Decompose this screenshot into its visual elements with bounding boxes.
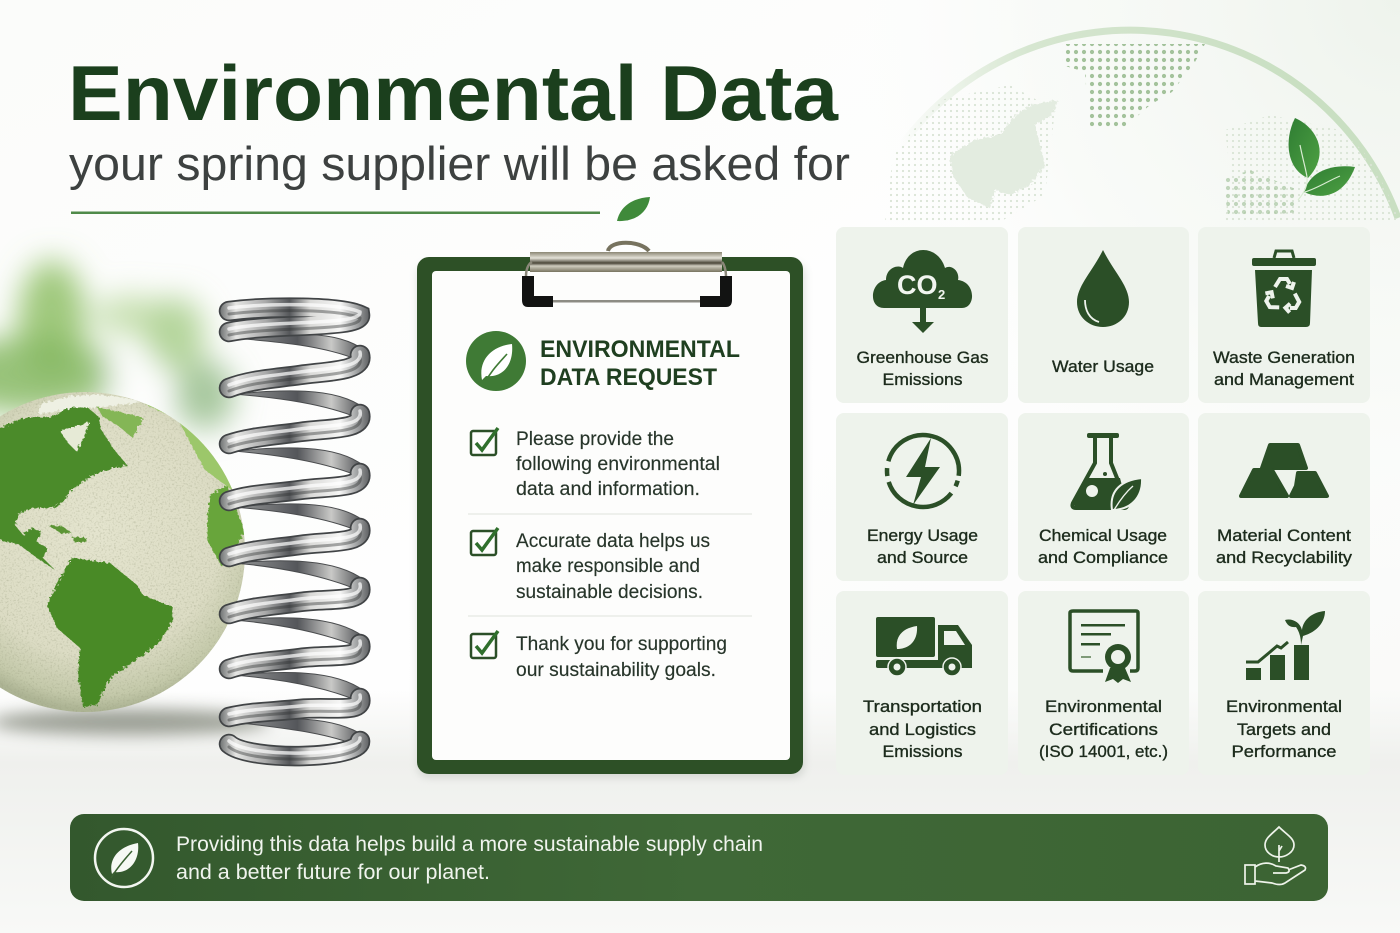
checklist item 3: [471, 631, 727, 681]
checklist item 3: our sustainability goals.: [516, 660, 716, 681]
banner text: Providing this data helps build a more sustainable supply chain: [176, 833, 763, 856]
checklist item 2: Accurate data helps us: [516, 531, 710, 552]
icon: CO2 cloud: [873, 250, 972, 333]
icon: hand holding leaf: [1245, 827, 1306, 884]
panel heading: [540, 336, 740, 391]
label: [867, 526, 978, 567]
card: waste generation: [1198, 227, 1370, 403]
photo: moss globe: [0, 392, 270, 735]
checklist item 1: Please provide the: [516, 429, 674, 450]
label: and Management: [1214, 370, 1354, 389]
label: and Logistics: [869, 720, 976, 739]
card: targets: [1198, 591, 1370, 775]
banner text: [176, 833, 763, 884]
icon: top-right green leaves: [1289, 118, 1355, 200]
icon: CO2 cloud: 2: [938, 287, 945, 302]
label: [1213, 348, 1355, 389]
top-right background tint: [780, 0, 1400, 620]
banner text: and a better future for our planet.: [176, 861, 490, 884]
table surface: [0, 690, 1400, 933]
icon: stacked ingots: [1241, 445, 1327, 496]
label: [863, 697, 982, 761]
title divider with leaf: [71, 197, 650, 221]
label: and Source: [877, 548, 968, 567]
panel heading: ENVIRONMENTAL: [540, 336, 740, 363]
checklist item 1: data and information.: [516, 479, 700, 500]
panel: clipboard: [417, 243, 805, 778]
icon: recycling bin: [1252, 251, 1316, 327]
metal clip: [522, 243, 732, 307]
icon: leaf in circle: [95, 829, 153, 887]
checklist item 1: [471, 428, 720, 500]
banner: [70, 814, 1328, 901]
checklist item 2: sustainable decisions.: [516, 582, 703, 603]
label: Chemical Usage: [1039, 526, 1167, 545]
clipboard paper: [432, 271, 790, 760]
world map globe watermark: [885, 30, 1400, 224]
card: energy usage: [836, 413, 1008, 581]
icon: growth bars with sprout: [1246, 611, 1325, 680]
label: Waste Generation: [1213, 348, 1355, 367]
label: [1216, 526, 1353, 567]
subtitle: your spring supplier will be asked for: [69, 137, 850, 190]
label: and Recyclability: [1216, 548, 1353, 567]
title: Environmental Data: [68, 49, 839, 137]
label: [856, 348, 988, 389]
checklist item 2: [471, 528, 710, 603]
continents: [0, 395, 245, 707]
checklist item 3: Thank you for supporting: [516, 634, 727, 655]
card: water usage: [1018, 227, 1189, 403]
card: transportation: [836, 591, 1008, 775]
label: Transportation: [863, 697, 982, 716]
icon: delivery truck with leaf: [876, 617, 972, 676]
label: Emissions: [882, 370, 962, 389]
label: [1038, 526, 1168, 567]
icon: CO2 cloud: CO: [897, 270, 938, 300]
icon: leaf badge: [466, 331, 526, 391]
icon: energy bolt in ring: [881, 429, 965, 513]
card: material content: [1198, 413, 1370, 581]
label: Greenhouse Gas: [856, 348, 988, 367]
label: Environmental: [1226, 697, 1342, 716]
label: Performance: [1232, 742, 1336, 761]
label: Environmental: [1045, 697, 1162, 716]
label: Certifications: [1049, 720, 1158, 739]
label: Targets and: [1237, 720, 1331, 739]
label: Energy Usage: [867, 526, 978, 545]
checklist item 1: following environmental: [516, 454, 720, 475]
icon: flask with leaf: [1072, 433, 1142, 510]
label: Material Content: [1217, 526, 1351, 545]
label: Water Usage: [1052, 357, 1154, 376]
card: chemical usage: [1018, 413, 1189, 581]
label: (ISO 14001, etc.): [1039, 742, 1168, 761]
blurred foliage backdrop: [0, 260, 235, 430]
icon: certificate with rosette: [1070, 611, 1138, 683]
label: and Compliance: [1038, 548, 1168, 567]
card: certifications: [1018, 591, 1189, 775]
globe surface grain: [0, 392, 245, 712]
label: [1039, 697, 1168, 761]
panel heading: DATA REQUEST: [540, 364, 717, 391]
label: Emissions: [882, 742, 962, 761]
label: [1226, 697, 1342, 761]
photo: metal compression spring: [229, 305, 364, 759]
icon: water drop: [1077, 250, 1129, 327]
checklist item 2: make responsible and: [516, 556, 700, 577]
card: greenhouse gas emissions: [836, 227, 1008, 403]
